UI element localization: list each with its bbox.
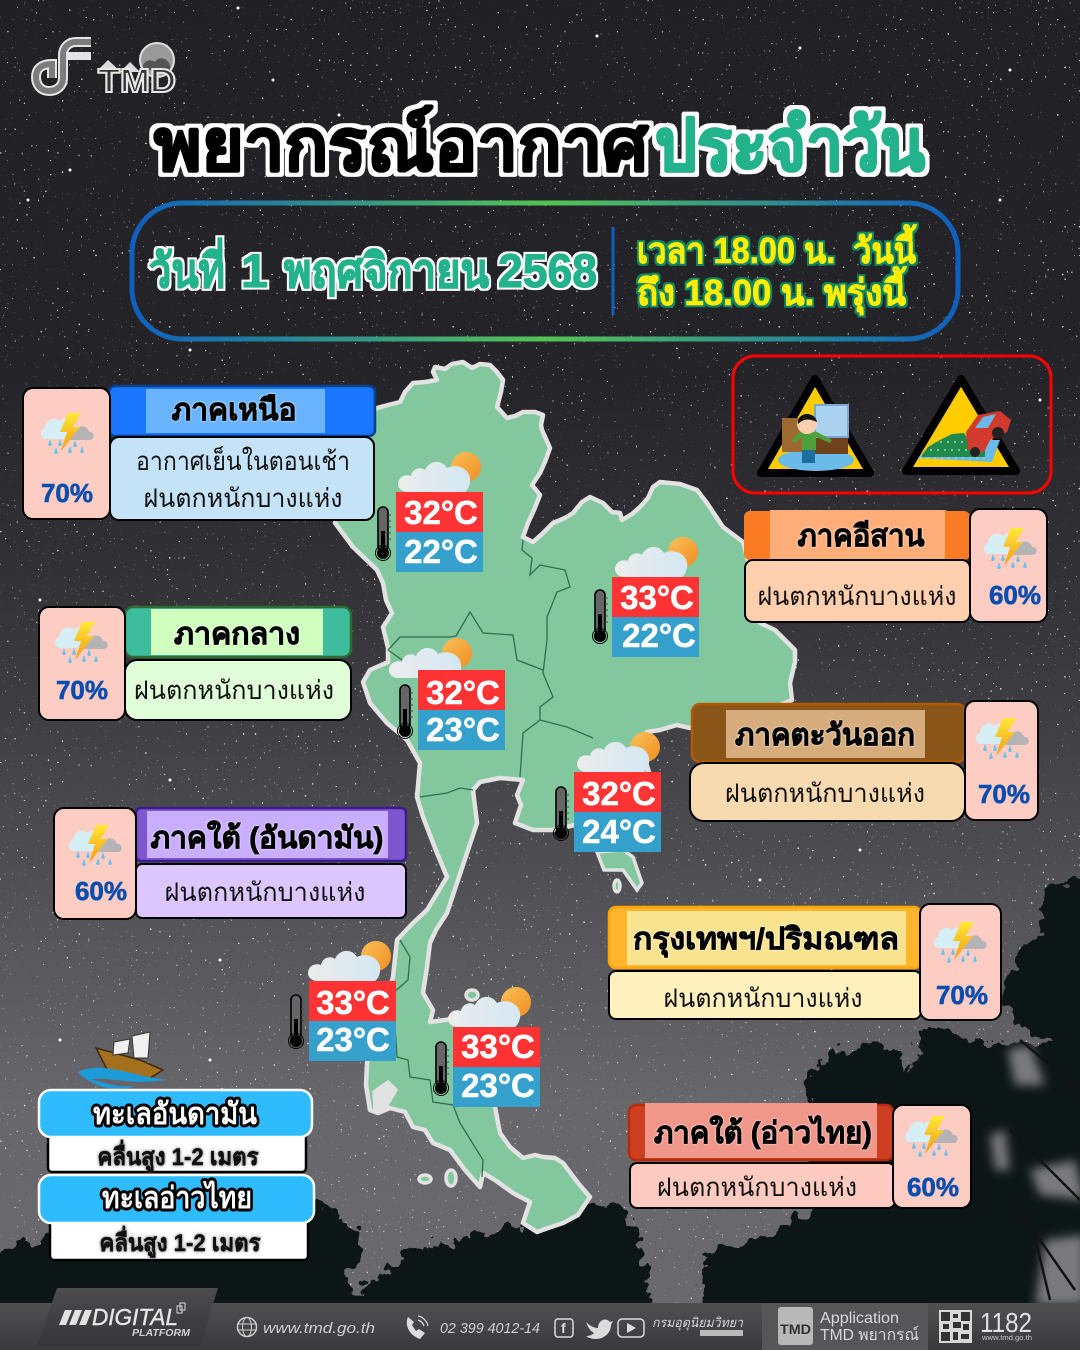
panel: northeast: ภาคอีสาน — [798, 520, 925, 553]
valid time — [637, 224, 917, 316]
panel: andaman sea — [39, 1090, 312, 1172]
date: พฤศจิกายน — [284, 244, 489, 297]
date — [149, 237, 597, 297]
temperature: north: 22°C — [404, 533, 478, 570]
panel: south andaman — [54, 808, 406, 919]
logo: TMD: TMD — [98, 62, 176, 99]
date: 1 — [241, 244, 268, 297]
hotline 1182: 1182 — [980, 1307, 1032, 1338]
panel: south gulf: 60% — [907, 1172, 959, 1202]
social icons: f — [561, 1320, 566, 1336]
panel: north: 70% — [41, 478, 93, 508]
temperature: northeast — [592, 537, 699, 657]
map of Thailand — [335, 362, 795, 1232]
temperature: northeast: 33°C — [620, 579, 694, 616]
panel: bangkok and vicinity: กรุงเทพฯ/ปริมณฑล — [633, 923, 899, 958]
temperature: south gulf: 23°C — [461, 1067, 535, 1104]
title: ประจำวัน — [655, 106, 925, 186]
panel: south gulf: ภาคใต้ (อ่าวไทย) — [654, 1115, 872, 1150]
panel: south andaman: 60% — [75, 876, 127, 906]
panel: central — [39, 607, 351, 720]
date: 2568 — [498, 244, 597, 297]
date and time panel — [132, 203, 958, 339]
temperature: central — [389, 638, 505, 750]
application: Application — [820, 1310, 899, 1327]
valid time: เวลา 18.00 น. วันนี้ — [637, 224, 917, 271]
panel: east: ภาคตะวันออก — [735, 719, 915, 752]
temperature: south andaman: 33°C — [316, 984, 390, 1021]
panel: north: อากาศเย็นในตอนเช้า — [136, 445, 350, 476]
application: TMD — [780, 1321, 811, 1337]
panel: bangkok and vicinity: 70% — [936, 980, 988, 1010]
footer bar — [0, 1288, 1080, 1350]
title — [154, 105, 925, 186]
temperature: north — [376, 452, 483, 572]
panel: east: ฝนตกหนักบางแห่ง — [725, 778, 925, 808]
temperature: east — [554, 732, 661, 852]
logo: TMD — [36, 42, 176, 99]
panel: central: ภาคกลาง — [174, 618, 300, 651]
panel: bangkok and vicinity: ฝนตกหนักบางแห่ง — [664, 983, 862, 1013]
panel: northeast: 60% — [989, 580, 1041, 610]
region boundaries — [388, 540, 593, 1177]
temperature: northeast: 22°C — [622, 617, 696, 654]
digital platform logo — [37, 1288, 218, 1346]
panel: bangkok and vicinity — [609, 904, 1001, 1020]
title: พยากรณ์อากาศ — [154, 105, 649, 186]
temperature: south gulf: 33°C — [461, 1028, 535, 1065]
icon: flash flood road warning — [906, 379, 1016, 471]
panel: north: ฝนตกหนักบางแห่ง — [144, 483, 342, 513]
date: วันที่ — [149, 237, 225, 297]
application — [778, 1307, 919, 1345]
tree silhouettes — [0, 883, 1080, 1320]
panel: central: ฝนตกหนักบางแห่ง — [134, 675, 334, 705]
phone — [407, 1316, 540, 1339]
panel: gulf of thailand: ทะเลอ่าวไทย — [102, 1180, 252, 1215]
panel: andaman sea: คลื่นสูง 1-2 เมตร — [98, 1139, 259, 1172]
digital platform logo: PLATFORM — [132, 1328, 191, 1339]
phone: 02 399 4012-14 — [440, 1320, 540, 1337]
icon: boat — [78, 1032, 165, 1089]
panel: south andaman: ฝนตกหนักบางแห่ง — [164, 877, 366, 907]
temperature: east: 24°C — [582, 813, 656, 850]
website — [237, 1318, 375, 1337]
temperature: south andaman — [288, 941, 396, 1061]
panel: northeast — [744, 509, 1047, 622]
panel: south andaman: ภาคใต้ (อันดามัน) — [150, 820, 384, 855]
application: TMD พยากรณ์ — [820, 1325, 919, 1344]
panel: gulf of thailand: คลื่นสูง 1-2 เมตร — [100, 1225, 261, 1258]
department name: กรมอุตุนิยมวิทยา — [652, 1315, 744, 1331]
panel: east — [690, 701, 1038, 821]
valid time: ถึง 18.00 น. พรุ่งนี้ — [637, 266, 907, 316]
temperature: north: 32°C — [404, 494, 478, 531]
website: www.tmd.go.th — [263, 1320, 375, 1337]
department name — [652, 1315, 744, 1336]
panel: south gulf — [629, 1103, 971, 1208]
digital platform logo: DIGITAL — [92, 1304, 178, 1330]
panel: north — [23, 386, 375, 520]
panel: andaman sea: ทะเลอันดามัน — [93, 1098, 257, 1131]
panel: central: 70% — [56, 675, 108, 705]
icon: flood warning — [761, 379, 870, 473]
temperature: central: 23°C — [426, 711, 500, 748]
panel: north: ภาคเหนือ — [172, 394, 296, 427]
panel: south gulf: ฝนตกหนักบางแห่ง — [657, 1172, 857, 1202]
qr code — [939, 1310, 972, 1343]
panel: east: 70% — [978, 779, 1030, 809]
temperature: central: 32°C — [426, 674, 500, 711]
panel: gulf of thailand — [39, 1175, 314, 1260]
social icons — [555, 1319, 644, 1339]
panel: northeast: ฝนตกหนักบางแห่ง — [758, 581, 956, 611]
temperature: east: 32°C — [582, 775, 656, 812]
hotline 1182: www.tmd.go.th — [981, 1335, 1032, 1342]
warning box — [733, 356, 1051, 493]
temperature: south andaman: 23°C — [316, 1021, 390, 1058]
temperature: south gulf — [434, 987, 540, 1107]
Trat coast and islands — [374, 850, 642, 1186]
